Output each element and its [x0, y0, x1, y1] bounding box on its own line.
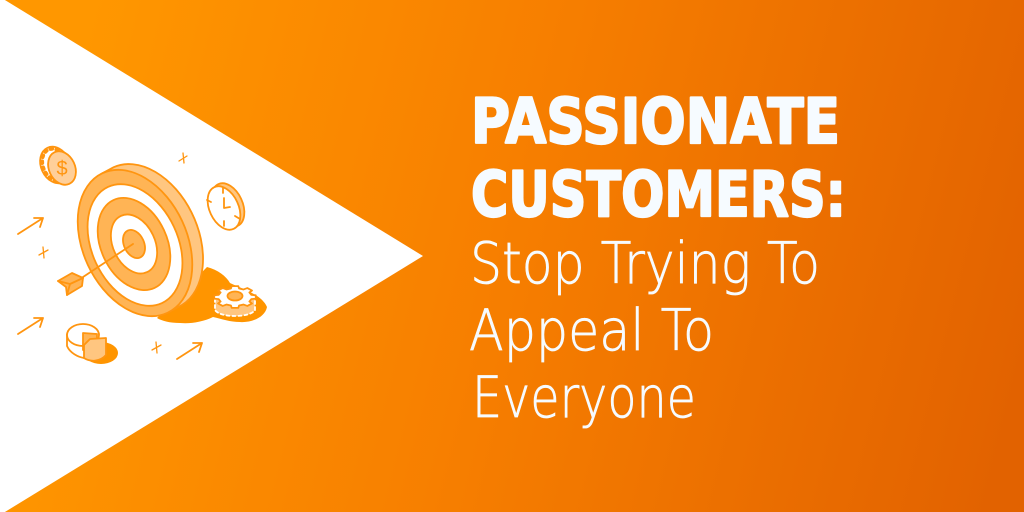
gear icon [214, 286, 256, 316]
coin icon [34, 142, 81, 189]
pie chart icon [67, 324, 118, 364]
headline [469, 85, 846, 431]
clock icon [201, 178, 251, 235]
subtitle line 1: Stop Trying To [470, 231, 820, 297]
target outer ring [55, 151, 215, 335]
illustration: target and icons [18, 142, 267, 364]
shadow under target and gear [157, 267, 267, 323]
subtitle line 2: Appeal To [469, 298, 714, 364]
coin icon: $ [56, 158, 68, 180]
cross mark left [39, 247, 48, 258]
arrow in target [58, 244, 133, 295]
title bold line 2: CUSTOMERS: [471, 158, 846, 231]
growth arrow bottom left [18, 318, 43, 334]
growth arrow top left [18, 218, 43, 234]
target side [80, 164, 203, 315]
white triangle panel [0, 0, 423, 512]
target board [55, 151, 215, 335]
target bullseye [119, 226, 149, 262]
cross mark top [179, 153, 187, 163]
cross mark bottom [152, 342, 161, 353]
target white ring [69, 169, 201, 321]
target inner white ring [102, 207, 166, 281]
subtitle line 3: Everyone [472, 365, 696, 431]
growth arrow bottom right [177, 343, 202, 359]
target middle ring [84, 186, 184, 302]
title bold line 1: PASSIONATE [471, 85, 840, 158]
